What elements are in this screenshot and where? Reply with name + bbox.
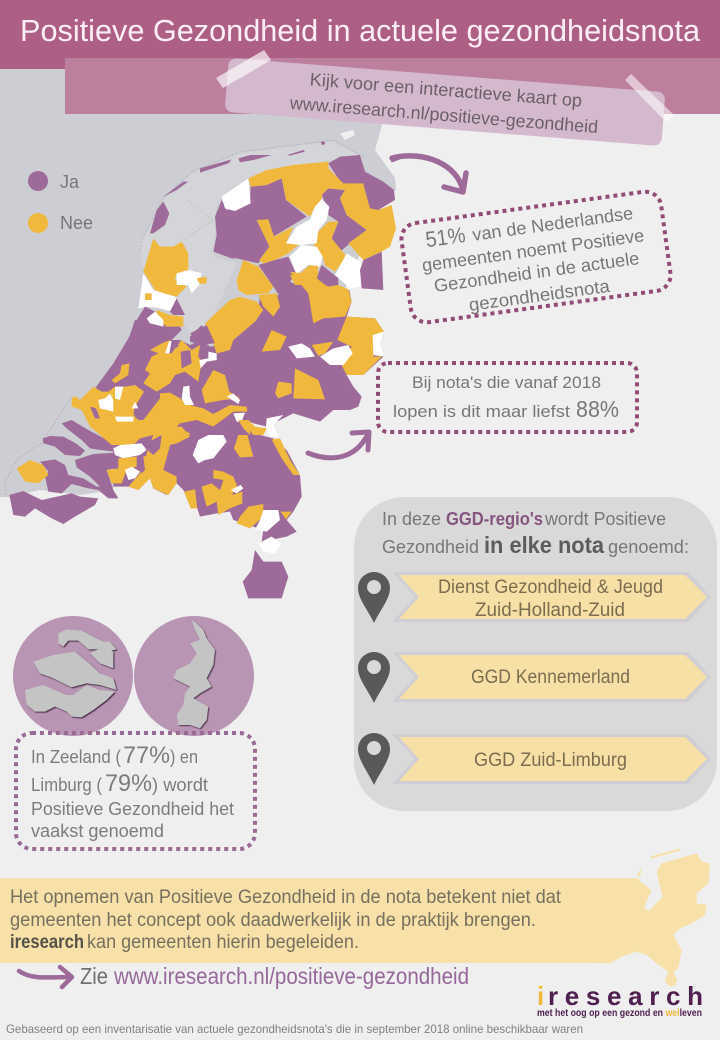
callout: Zeeland and Limburg: In Zeeland ( (31, 747, 121, 767)
link line: Zie (80, 963, 108, 989)
inner waters and coastline (140, 130, 363, 333)
arrow to link (19, 967, 72, 987)
note card: interactive map: Kijk voor een interactieve kaart op (309, 69, 583, 111)
callout: 51%: 51% (424, 222, 467, 252)
callout: 88%: Bij nota's die vanaf 2018 (412, 373, 601, 392)
logo: met het oog op een gezond en welleven (537, 1008, 702, 1019)
callout: Zeeland and Limburg: Positieve Gezondheid het (31, 799, 234, 819)
callout: 51%: van de Nederlandse (471, 203, 634, 245)
legend: Ja (60, 172, 80, 192)
region: Dienst Gezondheid & Jeugd: Dienst Gezondheid & Jeugd (438, 577, 663, 598)
panel heading: genoemd: (608, 537, 689, 557)
Randstad regions (72, 340, 250, 470)
yellow banner with map silhouette (0, 848, 710, 987)
circle: Zeeland map (13, 616, 133, 736)
banner text (10, 887, 562, 953)
callout: Zeeland and Limburg: Limburg ( (31, 775, 102, 795)
banner text: kan gemeenten hierin begeleiden. (87, 932, 359, 953)
link line: www.iresearch.nl/positieve-gezondheid (113, 963, 469, 989)
header bar (0, 0, 720, 69)
note card: interactive map (225, 58, 665, 146)
callout: 51%: gezondheidsnota (468, 276, 612, 315)
banner text: iresearch (10, 932, 84, 953)
region: GGD Zuid-Limburg (358, 733, 711, 785)
region: Dienst Gezondheid & Jeugd: Zuid-Holland-Zuid (475, 600, 625, 621)
arrow to callout 88% (308, 432, 369, 458)
callout: Zeeland and Limburg (16, 733, 255, 849)
panel heading: In deze (382, 509, 441, 529)
region: Dienst Gezondheid & Jeugd (358, 572, 711, 623)
callout: Zeeland and Limburg: ) wordt (152, 775, 208, 795)
purple base: north (213, 155, 395, 320)
purple base: Randstad (95, 320, 250, 470)
callout: 51%: gemeenten noemt Positieve (421, 225, 645, 275)
arrow to callout 51% (392, 156, 466, 192)
callout: Zeeland and Limburg: 77% (123, 742, 170, 769)
title: Positieve Gezondheid in actuele gezondheidsnota (20, 13, 701, 48)
tape right (625, 74, 674, 122)
south regions (17, 415, 300, 553)
banner text: gemeenten het concept ook daadwerkelijk in de praktijk brengen. (10, 910, 536, 931)
callout: Zeeland and Limburg: ) en (170, 747, 198, 767)
panel heading: Gezondheid (382, 537, 479, 557)
footnote: Gebaseerd op een inventarisatie van actuele gezondheidsnota's die in september 2018 online beschikbaar waren (6, 1022, 583, 1036)
panel heading: wordt Positieve (544, 509, 666, 529)
header strip (65, 58, 720, 114)
panel heading: GGD-regio's (446, 509, 543, 529)
sea background (0, 65, 396, 497)
region: GGD Zuid-Limburg: GGD Zuid-Limburg (474, 750, 627, 771)
region: GGD Kennemerland: GGD Kennemerland (471, 667, 630, 688)
yellow and white regions: east (205, 265, 384, 399)
callout: 88%: lopen is dit maar liefst (393, 402, 570, 421)
callout: Zeeland and Limburg: 79% (105, 770, 152, 797)
legend: Nee (60, 213, 93, 233)
map of the Netherlands (5, 130, 400, 598)
callout: 51% (399, 190, 673, 324)
legend (28, 171, 93, 233)
tape left (216, 50, 271, 88)
panel heading (382, 509, 689, 558)
non-responding and yellow regions: north (222, 162, 396, 295)
callout: 51%: Gezondheid in de actuele (433, 248, 640, 296)
north overlays (290, 265, 338, 286)
logo: research (548, 981, 703, 1011)
purple base: south and Zeeland (5, 397, 302, 598)
circle: Limburg map (134, 616, 254, 736)
purple base: east and centre (213, 290, 384, 427)
panel heading: in elke nota (484, 532, 604, 558)
region: GGD Kennemerland (358, 652, 711, 703)
Noord-Holland regions (137, 238, 215, 347)
callout: Zeeland and Limburg: vaakst genoemd (31, 821, 164, 841)
callout: 88% (378, 363, 637, 432)
banner text: Het opnemen van Positieve Gezondheid in de nota betekent niet dat (10, 887, 562, 908)
Wadden islands (200, 150, 400, 173)
note card: interactive map: www.iresearch.nl/positieve-gezondheid (288, 93, 599, 137)
callout: 88%: 88% (576, 396, 619, 422)
logo: i (537, 981, 544, 1011)
panel: GGD-regions (354, 497, 717, 811)
